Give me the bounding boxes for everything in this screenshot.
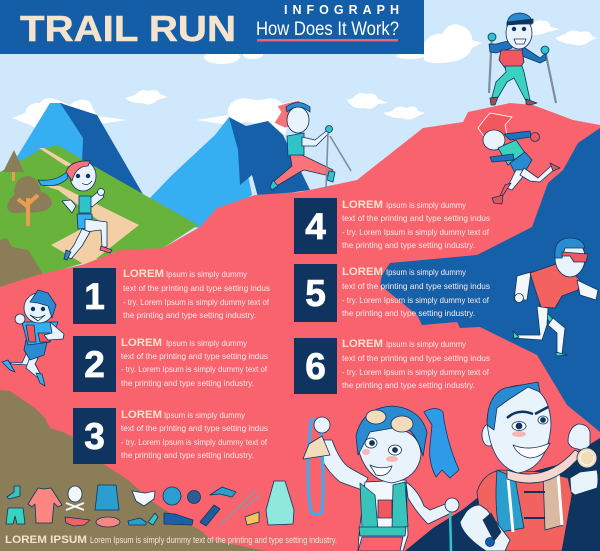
panel 1: 1: [84, 276, 105, 317]
raised arm: [322, 440, 368, 490]
icon: headband: [96, 517, 120, 527]
icon: poles: [220, 490, 260, 525]
icon: visor: [210, 487, 236, 497]
icon: trail shoes: [128, 518, 146, 525]
torso: [477, 470, 572, 551]
header banner: [0, 0, 424, 54]
subtitle: infograph: INFOGRAPH: [284, 3, 399, 17]
olive ground: [0, 390, 267, 551]
pole hand: [445, 498, 459, 512]
panel 3: LOREM: [121, 409, 162, 421]
right arm: [570, 470, 598, 495]
hair: [356, 406, 427, 456]
panel 1: - try. Lorem Ipsum is simply dummy text of: [123, 297, 270, 307]
panel 3: - try. Lorem Ipsum is simply dummy text of: [121, 437, 268, 447]
panel 1: LOREM: [123, 268, 164, 280]
brows: [507, 407, 548, 418]
footer text: LOREM IPSUM: [5, 534, 87, 546]
character: muscular runner: [513, 238, 598, 356]
icon: jacket: [266, 481, 294, 525]
head: [358, 428, 421, 483]
eyes: [512, 416, 548, 430]
icon: sock: [7, 486, 20, 499]
cheeks: [362, 449, 398, 462]
character: ponytail runner: [38, 161, 112, 260]
panel 5: 5: [305, 273, 326, 314]
panel 1: the printing and type setting industry.: [123, 310, 256, 320]
panel 4: [294, 198, 490, 254]
character: hiking woman: [270, 100, 351, 190]
title: TRAIL RUN: [20, 8, 236, 49]
panel 4: LOREM: [342, 199, 383, 211]
panel 4: - try. Lorem Ipsum is simply dummy text of: [342, 227, 490, 237]
green hill: [0, 145, 198, 290]
panel 6: - try. Lorem Ipsum is simply dummy text of: [342, 367, 490, 377]
panel 2: - try. Lorem Ipsum is simply dummy text of: [121, 364, 268, 374]
trekking pole: [450, 510, 451, 551]
panel 6: [294, 338, 490, 394]
icon: crossbones: [66, 503, 84, 510]
icon: stopwatch: [163, 487, 181, 505]
vest left: [496, 470, 524, 532]
icon: sandal: [148, 513, 158, 525]
panel 1: text of the printing and type setting indus: [123, 283, 270, 293]
panel 2: the printing and type setting industry.: [121, 378, 254, 388]
panel 1: Ipsum is simply dummy: [166, 269, 248, 279]
medal rim: [580, 451, 594, 465]
panel 3: Ipsum is simply dummy: [164, 410, 246, 420]
icon: vest: [95, 485, 119, 510]
panel 5: text of the printing and type setting indus: [342, 281, 490, 291]
left arm: [460, 505, 510, 551]
panel 4: 4: [305, 206, 326, 247]
ribbon: [507, 450, 582, 483]
clouds: [12, 20, 597, 135]
panel 3: the printing and type setting industry.: [121, 450, 254, 460]
character: red-haired runner: [478, 113, 560, 204]
icon: handshake: [132, 491, 155, 506]
vest straps: [508, 472, 562, 532]
icon: glasses: [65, 517, 90, 526]
icon: watch: [188, 490, 200, 504]
panel 6: text of the printing and type setting indus: [342, 353, 490, 363]
panel 2: [73, 336, 268, 392]
middle mountain: [150, 117, 310, 228]
panel 5: [294, 264, 490, 322]
panel 2: text of the printing and type setting indus: [121, 351, 268, 361]
wristband: [483, 513, 501, 541]
smile: [513, 443, 550, 458]
panel 5: the printing and type setting industry.: [342, 308, 475, 318]
panel 5: LOREM: [342, 266, 383, 278]
panel 3: 3: [84, 416, 105, 457]
panel 2: Ipsum is simply dummy: [166, 338, 248, 348]
dark blue mountain: [380, 128, 600, 432]
panel 6: the printing and type setting industry.: [342, 380, 475, 390]
panel 6: LOREM: [342, 338, 383, 350]
panel 2: 2: [84, 344, 105, 385]
ponytail: [424, 408, 459, 478]
raised hand: [314, 417, 330, 433]
hand: [568, 424, 590, 450]
panel 6: 6: [305, 346, 326, 387]
ear: [482, 424, 496, 446]
icon: wallet: [245, 512, 259, 525]
footer text: [5, 534, 337, 546]
trail path: [39, 148, 139, 266]
character: big woman with medal: [303, 406, 459, 551]
medal lanyard: [308, 420, 323, 514]
other arm: [406, 482, 451, 524]
panel 3: text of the printing and type setting indus: [121, 423, 268, 433]
panel 4: the printing and type setting industry.: [342, 240, 475, 250]
gear icons: [6, 481, 294, 527]
triangular medal: [303, 436, 330, 459]
icon: t-shirt: [28, 488, 62, 523]
panel 3: [73, 408, 268, 464]
goggles: [366, 410, 413, 432]
vest right: [543, 470, 563, 530]
panel 4: text of the printing and type setting indus: [342, 213, 490, 223]
head: [487, 385, 551, 473]
round tree: [7, 176, 52, 226]
character: small jumping man: [2, 290, 64, 386]
panel 2: LOREM: [121, 337, 162, 349]
panel 5: - try. Lorem Ipsum is simply dummy text of: [342, 295, 490, 305]
icon: skull: [68, 486, 82, 502]
eyes: [365, 438, 402, 455]
watch: [486, 538, 494, 546]
icon: bottle: [200, 505, 220, 526]
subtitle: how does it work: How Does It Work?: [256, 19, 399, 40]
character: big man with medal: [460, 382, 598, 551]
panel 5: Ipsum is simply dummy: [386, 267, 467, 277]
chest lines: [524, 492, 545, 518]
panel 6: Ipsum is simply dummy: [386, 339, 467, 349]
cheek: [512, 431, 526, 437]
torso: [358, 480, 408, 551]
navy foreground: [405, 438, 600, 551]
smile: [370, 465, 392, 476]
olive foreground hill: [0, 238, 44, 290]
icon: shorts: [6, 508, 25, 524]
left mountain: [15, 103, 144, 196]
underline: [257, 39, 398, 42]
hair: [487, 382, 540, 430]
footer text: Lorem Ipsum is simply dummy text of the printing and type setting industry.: [90, 535, 337, 545]
character: top hiker: [488, 13, 556, 105]
pine tree: [3, 150, 24, 181]
icon: running shoe: [164, 513, 193, 525]
panel 1: [73, 268, 270, 324]
panel 4: Ipsum is simply dummy: [386, 200, 467, 210]
medal: [577, 448, 597, 468]
